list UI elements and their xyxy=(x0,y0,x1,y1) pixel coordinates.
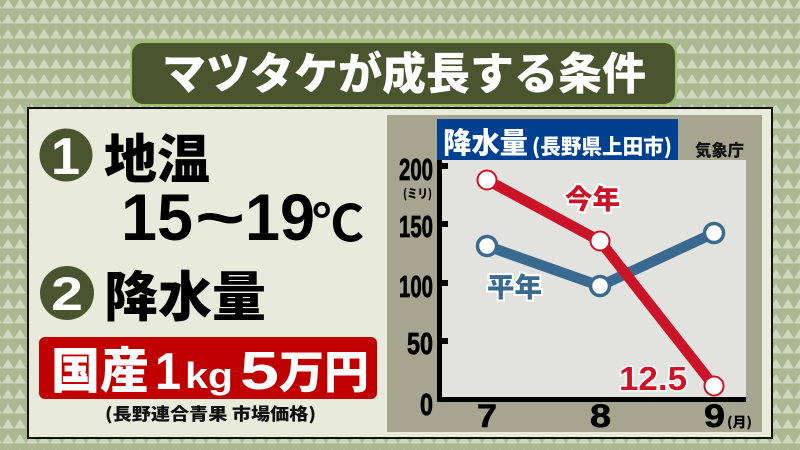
price callout xyxy=(39,332,377,403)
x axis: 8 xyxy=(590,398,611,434)
price callout: kg xyxy=(185,355,233,396)
value: temperature range xyxy=(121,180,364,256)
chart heading: (長野県上田市) xyxy=(532,131,672,161)
line: this year xyxy=(478,170,724,396)
value: temperature range: 15 xyxy=(121,180,193,254)
price callout: 1 xyxy=(155,343,181,401)
value: temperature range: ℃ xyxy=(312,184,364,256)
y axis: (ミリ) xyxy=(403,183,432,202)
panel: rainfall chart xyxy=(387,115,762,434)
panel: conditions and chart xyxy=(28,108,772,438)
value: temperature range: ~ xyxy=(195,180,245,254)
price callout: 万円 xyxy=(279,336,369,401)
price callout: 5 xyxy=(240,341,279,401)
y axis: 50 xyxy=(407,326,433,361)
plot area xyxy=(441,160,746,398)
label: value 12.5: 12.5 xyxy=(619,360,687,397)
icon: number 2: 2 xyxy=(51,267,83,320)
source note: market price: (長野連合青果 市場価格) xyxy=(105,400,316,425)
x axis: 7 xyxy=(477,398,497,434)
heading: rainfall: 降水量 xyxy=(104,253,266,332)
label: average year: 平年 xyxy=(487,266,542,305)
icon: number 1: 1 xyxy=(51,128,80,186)
price callout: 国産 xyxy=(51,332,149,403)
x axis xyxy=(437,397,752,434)
y axis: 100 xyxy=(399,269,433,304)
y axis: 0 xyxy=(420,387,433,422)
icon: number 1 xyxy=(40,128,92,186)
label: this year: 今年 xyxy=(565,178,620,217)
line: average year xyxy=(478,224,724,296)
x axis: 9 xyxy=(704,398,725,434)
value: temperature range: 19 xyxy=(245,180,315,254)
condition 2: rainfall xyxy=(40,253,266,332)
y axis: 200 xyxy=(399,152,433,187)
icon: number 2 xyxy=(40,266,94,320)
chart heading: 降水量 xyxy=(443,120,528,162)
y axis xyxy=(399,152,448,422)
source: JMA: 気象庁 xyxy=(695,137,744,161)
condition 1: soil temperature xyxy=(40,118,364,256)
x axis: (月) xyxy=(727,411,752,431)
title banner: マツタケが成長する条件 xyxy=(162,38,646,102)
chart heading xyxy=(437,119,678,162)
y axis: 150 xyxy=(399,209,433,244)
heading: soil temperature: 地温 xyxy=(104,118,210,194)
